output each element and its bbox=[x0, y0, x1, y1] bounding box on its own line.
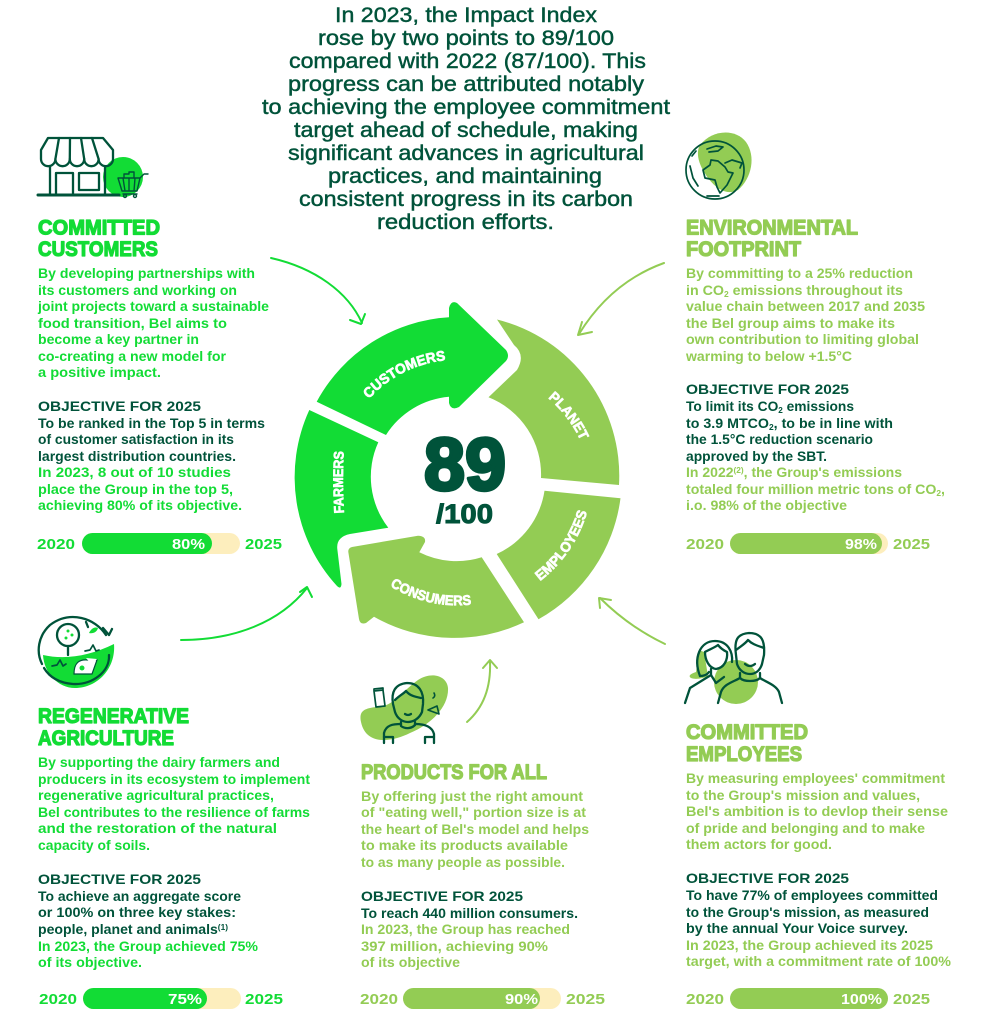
description: Bel contributes to the resilience of farms bbox=[38, 805, 310, 820]
panel: committed customers bbox=[37, 138, 282, 554]
heading bbox=[686, 216, 858, 261]
icon: two people bbox=[685, 633, 782, 704]
description: By developing partnerships with bbox=[38, 266, 255, 281]
intro text: to achieving the employee commitment bbox=[262, 96, 670, 119]
heading: ENVIRONMENTAL bbox=[686, 216, 858, 240]
objective: To have 77% of employees committed bbox=[686, 888, 938, 903]
description: emissions throughout its bbox=[729, 283, 903, 298]
description: warming to below +1.5°C bbox=[685, 349, 852, 364]
progress bar: 75% bbox=[39, 988, 283, 1009]
objective: 2 bbox=[769, 423, 774, 432]
objective: To limit its CO bbox=[686, 399, 776, 414]
description: of "eating well," portion size is at bbox=[361, 805, 587, 820]
objective: To reach 440 million consumers. bbox=[361, 906, 578, 921]
objective: OBJECTIVE FOR 2025 bbox=[686, 381, 849, 397]
description: co-creating a new model for bbox=[38, 349, 227, 364]
objective: emissions bbox=[783, 399, 854, 414]
donut chart: impact index bbox=[294, 302, 620, 638]
progress bar: 90%: 2025 bbox=[566, 992, 605, 1008]
intro text bbox=[262, 4, 670, 234]
description: By offering just the right amount bbox=[361, 789, 584, 804]
description: capacity of soils. bbox=[38, 838, 150, 853]
objective: In 2023, the Group achieved 75% bbox=[38, 939, 258, 954]
icon: person with food bbox=[360, 675, 448, 743]
progress bar: 75%: 2025 bbox=[245, 992, 283, 1008]
objective: OBJECTIVE FOR 2025 bbox=[361, 888, 523, 904]
intro text: rose by two points to 89/100 bbox=[318, 27, 614, 50]
progress bar: 80% bbox=[37, 533, 282, 554]
objective: To achieve an aggregate score bbox=[38, 889, 241, 904]
icon: globe bbox=[686, 133, 752, 199]
segment: consumers: CONSUMERS bbox=[392, 579, 471, 606]
description: value chain between 2017 and 2035 bbox=[686, 299, 926, 314]
progress bar: 75%: 2020 bbox=[39, 992, 77, 1008]
objective: In 2022 bbox=[686, 465, 732, 480]
objective: In 2023, 8 out of 10 studies bbox=[38, 465, 231, 480]
objective: achieving 80% of its objective. bbox=[38, 498, 242, 513]
segment: planet bbox=[488, 320, 620, 485]
objective bbox=[38, 871, 258, 970]
heading: CUSTOMERS bbox=[38, 237, 158, 261]
intro text: target ahead of schedule, making bbox=[294, 119, 638, 142]
description: to make its products available bbox=[361, 838, 569, 853]
description: By supporting the dairy farmers and bbox=[38, 755, 280, 770]
heading bbox=[38, 704, 189, 750]
description: and the restoration of the natural bbox=[38, 821, 277, 836]
progress bar: 100%: 2020 bbox=[686, 992, 724, 1008]
segment: planet: PLANET bbox=[548, 391, 590, 438]
description bbox=[37, 266, 270, 380]
objective: i.o. 98% of the objective bbox=[686, 498, 848, 513]
segment: customers: CUSTOMERS bbox=[364, 350, 446, 398]
description: producers in its ecosystem to implement bbox=[38, 772, 311, 787]
description: 2 bbox=[724, 290, 729, 299]
intro text: In 2023, the Impact Index bbox=[335, 4, 598, 27]
intro text: compared with 2022 (87/100). This bbox=[289, 50, 646, 73]
description: By committing to a 25% reduction bbox=[686, 266, 913, 281]
icon: store and cart bbox=[38, 138, 148, 198]
objective: 2 bbox=[936, 489, 942, 498]
objective: the 1.5°C reduction scenario bbox=[686, 432, 873, 447]
heading: PRODUCTS FOR ALL bbox=[361, 760, 547, 784]
progress bar: 90% bbox=[360, 988, 605, 1009]
description bbox=[361, 789, 589, 870]
panel: regenerative agriculture bbox=[38, 617, 311, 1009]
panel: committed employees bbox=[685, 633, 951, 1009]
objective bbox=[686, 870, 951, 969]
arrow: products bbox=[467, 660, 497, 722]
heading bbox=[38, 216, 160, 261]
objective: OBJECTIVE FOR 2025 bbox=[38, 871, 201, 887]
progress bar: 80%: 2025 bbox=[245, 537, 282, 553]
progress bar: 90%: 90% bbox=[505, 992, 538, 1008]
description: them actors for good. bbox=[686, 837, 832, 852]
description: to as many people as possible. bbox=[361, 855, 565, 870]
objective bbox=[38, 398, 265, 513]
objective: In 2023, the Group achieved its 2025 bbox=[686, 938, 934, 953]
objective: (2) bbox=[734, 466, 744, 475]
objective: by the annual Your Voice survey. bbox=[686, 921, 908, 936]
progress bar: 80%: 2020 bbox=[37, 537, 75, 553]
description: own contribution to limiting global bbox=[686, 332, 919, 347]
objective: of its objective bbox=[361, 955, 461, 970]
heading: AGRICULTURE bbox=[38, 726, 174, 750]
objective: target, with a commitment rate of 100% bbox=[686, 954, 951, 969]
objective: to the Group's mission, as measured bbox=[686, 905, 929, 920]
progress bar: 75%: 75% bbox=[168, 992, 202, 1008]
description: By measuring employees' commitment bbox=[686, 771, 946, 786]
score: 89/100: /100 bbox=[436, 499, 493, 529]
objective: , the Group's emissions bbox=[744, 465, 902, 480]
arrow: planet bbox=[578, 263, 664, 335]
segment: farmers bbox=[294, 410, 388, 588]
progress bar: 98% bbox=[686, 533, 930, 554]
segment: consumers bbox=[348, 536, 524, 638]
heading: REGENERATIVE bbox=[38, 704, 189, 728]
objective: 397 million, achieving 90% bbox=[361, 939, 548, 954]
segment: farmers: FARMERS bbox=[332, 451, 344, 514]
heading: EMPLOYEES bbox=[686, 742, 802, 766]
segment: employees bbox=[496, 490, 620, 620]
description: of pride and belonging and to make bbox=[686, 821, 926, 836]
progress bar: 80%: 80% bbox=[172, 537, 205, 553]
objective: 2 bbox=[778, 406, 783, 415]
description: Bel's ambition is to devlop their sense bbox=[686, 804, 949, 819]
segment: customers bbox=[316, 302, 508, 435]
objective: approved by the SBT. bbox=[686, 449, 827, 464]
score: 89/100: 89 bbox=[424, 423, 506, 506]
objective: totaled four million metric tons of CO bbox=[686, 482, 925, 497]
objective bbox=[361, 888, 578, 970]
objective: OBJECTIVE FOR 2025 bbox=[686, 870, 849, 886]
description: the Bel group aims to make its bbox=[686, 316, 895, 331]
description: become a key partner in bbox=[38, 332, 199, 347]
description bbox=[686, 771, 949, 852]
progress bar: 98%: 2025 bbox=[893, 537, 930, 553]
objective: to 3.9 MTCO bbox=[686, 416, 765, 431]
progress bar: 98%: 98% bbox=[845, 537, 877, 553]
description: food transition, Bel aims to bbox=[38, 316, 227, 331]
description: to the Group's mission and values, bbox=[686, 788, 920, 803]
description: a positive impact. bbox=[38, 365, 161, 380]
objective: people, planet and animals bbox=[38, 922, 211, 937]
objective: , to be in line with bbox=[774, 416, 893, 431]
objective: of its objective. bbox=[38, 955, 142, 970]
progress bar: 100%: 2025 bbox=[893, 992, 930, 1008]
objective: (1) bbox=[218, 923, 228, 932]
arrow: employees bbox=[599, 598, 665, 644]
description: joint projects toward a sustainable bbox=[37, 299, 270, 314]
description: regenerative agricultural practices, bbox=[38, 788, 274, 803]
description bbox=[685, 266, 926, 364]
intro text: significant advances in agricultural bbox=[288, 142, 644, 165]
objective: In 2023, the Group has reached bbox=[361, 922, 570, 937]
objective bbox=[686, 381, 945, 513]
arrow: regenerative agriculture bbox=[181, 587, 312, 640]
progress bar: 100% bbox=[686, 988, 930, 1009]
progress bar: 90%: 2020 bbox=[360, 992, 398, 1008]
segment: employees: EMPLOYEES bbox=[534, 510, 587, 581]
objective: or 100% on three key stakes: bbox=[38, 905, 236, 920]
progress bar: 98%: 2020 bbox=[686, 537, 724, 553]
panel: environmental footprint bbox=[685, 133, 945, 554]
progress bar: 100%: 100% bbox=[841, 992, 882, 1008]
intro text: consistent progress in its carbon bbox=[299, 188, 633, 211]
heading: FOOTPRINT bbox=[686, 237, 801, 261]
objective: To be ranked in the Top 5 in terms bbox=[38, 416, 265, 431]
arrow: customers bbox=[271, 258, 365, 324]
objective: place the Group in the top 5, bbox=[38, 482, 233, 497]
objective: , bbox=[941, 482, 945, 497]
intro text: progress can be attributed notably bbox=[288, 73, 645, 96]
panel: products for all bbox=[360, 675, 605, 1009]
description: the heart of Bel's model and helps bbox=[361, 822, 589, 837]
description bbox=[38, 755, 311, 853]
objective: OBJECTIVE FOR 2025 bbox=[38, 398, 201, 414]
objective: largest distribution countries. bbox=[38, 449, 236, 464]
heading: COMMITTED bbox=[686, 720, 808, 744]
heading: COMMITTED bbox=[38, 216, 160, 240]
intro text: practices, and maintaining bbox=[328, 165, 602, 188]
objective: of customer satisfaction in its bbox=[38, 432, 234, 447]
icon: farm landscape bbox=[39, 617, 114, 688]
description: its customers and working on bbox=[38, 283, 237, 298]
description: in CO bbox=[686, 283, 722, 298]
intro text: reduction efforts. bbox=[377, 211, 554, 234]
heading bbox=[686, 720, 808, 766]
